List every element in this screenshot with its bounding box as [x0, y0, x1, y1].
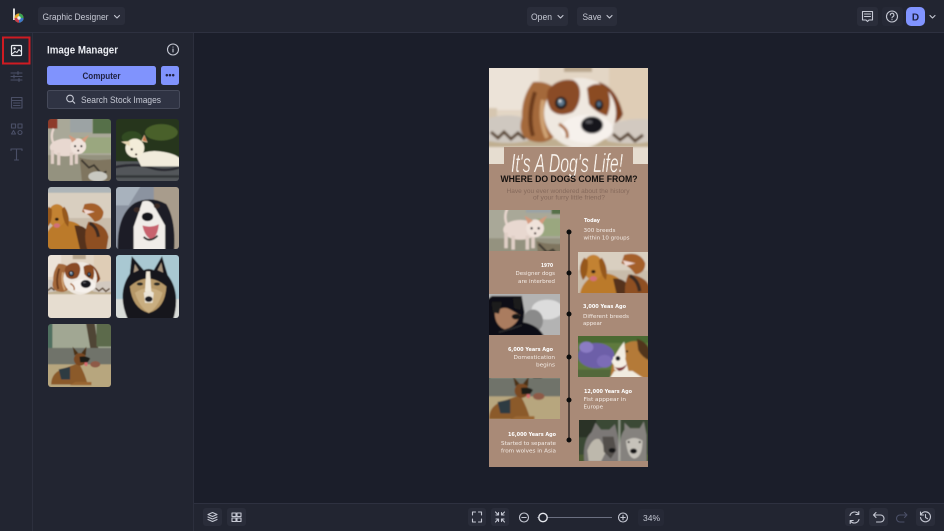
entry: today: Today	[584, 218, 600, 224]
icon: undo	[869, 508, 888, 526]
button: Open: Open	[531, 12, 552, 23]
entry: 16,000 years ago: Started to separate	[501, 441, 557, 447]
thumbnail: happy black and white dog	[116, 187, 179, 249]
zoom slider	[520, 513, 628, 522]
left icon rail	[0, 33, 33, 531]
photo: german shepherd	[473, 345, 566, 433]
top toolbar	[0, 0, 944, 33]
button: search stock images: Search Stock Images	[81, 95, 161, 106]
entry: today: within 10 groups	[584, 236, 630, 242]
icon: adjustments	[11, 72, 22, 82]
poster background	[489, 68, 648, 467]
thumbnail: german shepherd	[48, 324, 111, 387]
title panel	[504, 147, 633, 167]
bottom toolbar	[194, 503, 944, 531]
icon: layout	[12, 98, 22, 108]
thumbnail: chihuahua on rock	[116, 119, 179, 181]
entry: 3,000 years ago	[583, 304, 629, 327]
button: search stock images	[48, 90, 180, 108]
highlight box	[3, 38, 30, 64]
photo: dachshunds	[571, 228, 662, 312]
entry: 12,000 years ago: Fist apppear in	[584, 397, 626, 403]
photo: wolves	[572, 413, 655, 468]
icon: help	[882, 7, 903, 26]
entry: 6,000 years ago: 6,000 Years Ago	[508, 347, 553, 353]
entry: 16,000 years ago: from wolves in Asia	[501, 448, 556, 454]
photo: chihuahua	[480, 190, 587, 275]
panel heading: Image Manager	[47, 44, 119, 56]
button: computer: Computer	[82, 71, 121, 82]
button: more	[161, 66, 179, 85]
intro text	[506, 189, 630, 202]
icon: history	[916, 508, 935, 526]
entry: today	[584, 218, 630, 242]
icon: sync	[845, 508, 864, 526]
button: more: •••	[165, 70, 175, 80]
thumbnail: dachshunds	[48, 187, 111, 249]
entry: 12,000 years ago	[584, 389, 632, 410]
icon: fullscreen	[468, 508, 486, 526]
button: computer	[47, 66, 156, 85]
button: Save	[577, 7, 617, 26]
dropdown: Graphic Designer	[38, 7, 125, 25]
thumbnail: husky	[116, 255, 179, 318]
entry: 1970: are interbred	[518, 279, 555, 285]
entry: 3,000 years ago: appear	[583, 321, 603, 327]
panel: image manager	[47, 33, 194, 531]
entry: 1970: 1970	[541, 263, 553, 269]
icon: text	[11, 149, 22, 160]
title: It's A Dog's Life!	[511, 148, 623, 178]
dropdown: Graphic Designer: Graphic Designer	[42, 12, 108, 23]
entry: 6,000 years ago	[508, 347, 555, 368]
hero photo: cavalier spaniel	[469, 48, 669, 218]
photo: collie with flowers	[571, 329, 655, 385]
icon: info	[168, 44, 178, 55]
icon: layers	[203, 508, 222, 526]
entry: 12,000 years ago: 12,000 Years Ago	[584, 389, 632, 395]
timeline	[566, 230, 572, 442]
entry: 3,000 years ago: 3,000 Yeas Ago	[583, 304, 626, 310]
entry: 16,000 years ago	[501, 432, 557, 454]
zoom level: 34%	[643, 513, 660, 523]
zoom level	[638, 509, 664, 526]
entry: 6,000 years ago: Domestication	[514, 355, 555, 361]
intro text: Have you ever wondered about the history	[506, 189, 630, 195]
avatar: D	[912, 12, 919, 24]
icon: elements	[12, 124, 22, 134]
poster: It's A Dog's Life	[469, 48, 669, 468]
entry: 3,000 years ago: Different breeds	[583, 314, 629, 320]
heading: WHERE DO DOGS COME FROM?	[500, 174, 638, 184]
photo: black and tan dog	[482, 287, 567, 344]
icon: grid	[227, 508, 246, 526]
entry: 1970: Designer dogs	[516, 271, 555, 277]
entry: today: 300 breeds	[584, 228, 616, 234]
icon: fit to screen	[491, 508, 509, 526]
button: Open	[527, 7, 568, 26]
thumbnail: cavalier spaniel	[48, 255, 111, 318]
button: Save: Save	[582, 12, 602, 23]
intro text: of your furry little friend?	[533, 196, 606, 202]
entry: 1970	[516, 263, 555, 285]
icon: avatar caret	[930, 16, 935, 18]
entry: 12,000 years ago: Europe	[584, 404, 604, 410]
entry: 16,000 years ago: 16,000 Years Ago	[508, 432, 556, 438]
avatar	[906, 7, 925, 26]
icon: image manager	[12, 46, 22, 56]
icon: comments	[857, 7, 878, 26]
icon: app logo	[14, 8, 24, 23]
thumbnail: white chihuahua standing	[48, 119, 111, 181]
entry: 6,000 years ago: begins	[536, 362, 555, 368]
icon: redo	[897, 512, 907, 522]
